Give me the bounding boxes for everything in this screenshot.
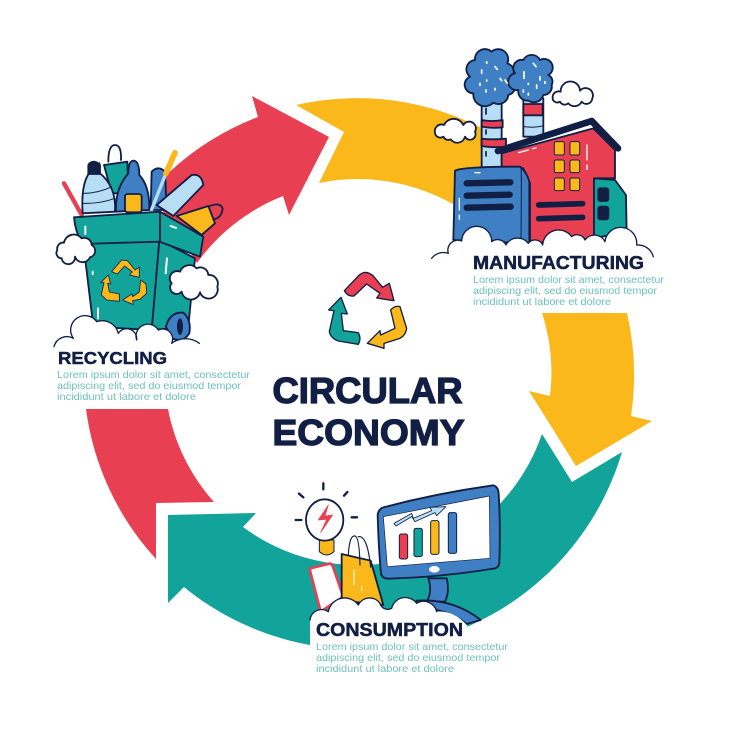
rays	[296, 483, 357, 520]
bar chart	[399, 513, 457, 559]
bin front	[83, 240, 159, 330]
phone	[310, 564, 343, 612]
red building	[502, 128, 615, 243]
smoke highlights	[480, 62, 545, 95]
small cloud left	[435, 119, 476, 143]
chimney right	[523, 98, 543, 137]
cloud base	[54, 316, 199, 350]
cloud left	[56, 235, 95, 264]
illustration: factory	[432, 49, 653, 260]
blue roll	[151, 168, 167, 210]
cloud base	[432, 226, 653, 260]
cloud base	[310, 597, 480, 683]
blue building	[453, 167, 529, 243]
small cloud right	[553, 81, 593, 106]
red stick	[64, 183, 82, 215]
text: recycling: RECYCLING	[58, 348, 167, 368]
arrow: yellow right	[529, 313, 652, 466]
roof	[498, 121, 618, 151]
monitor	[378, 485, 500, 579]
screwdriver	[152, 173, 166, 209]
title	[272, 370, 464, 453]
bin recycle symbol	[101, 260, 147, 305]
text: consumption: adipiscing elit, sed do eiusmod tempor	[316, 653, 501, 664]
title: ECONOMY	[272, 412, 464, 453]
illustration: recycling bin	[54, 145, 223, 350]
text: manufacturing: incididunt ut labore et dolore	[473, 297, 611, 308]
windows	[554, 142, 580, 191]
smoke right	[508, 55, 553, 102]
title: CIRCULAR	[272, 370, 462, 411]
text: consumption: Lorem ipsum dolor sit amet, consectetur	[316, 642, 509, 653]
shopping bag	[342, 554, 383, 605]
teal arrow	[329, 297, 360, 344]
smoke left	[465, 49, 516, 106]
red arrow	[344, 272, 394, 301]
text: consumption: incididunt ut labore et dolore	[316, 664, 454, 675]
text: recycling: incididunt ut labore et dolore	[57, 392, 196, 403]
yellow arrow	[367, 306, 407, 348]
text: consumption: CONSUMPTION	[316, 620, 463, 640]
text: recycling: Lorem ipsum dolor sit amet, consectetur	[57, 370, 251, 381]
teal bag	[104, 162, 129, 193]
light tube	[157, 175, 203, 216]
teal building	[594, 178, 627, 238]
yellow bag	[177, 206, 215, 235]
icon: recycle symbol	[329, 272, 407, 348]
text: manufacturing: MANUFACTURING	[473, 253, 644, 273]
text: recycling: adipiscing elit, sed do eiusmod tempor	[57, 381, 242, 392]
illustration: consumption	[296, 483, 500, 683]
arrow: red lower	[86, 409, 214, 559]
blue bottle	[116, 161, 149, 212]
light bulb	[319, 540, 334, 555]
bin lid	[74, 212, 203, 257]
trend arrow	[394, 507, 446, 526]
arrow: teal bottom	[168, 434, 622, 649]
text: recycling	[57, 348, 251, 403]
text: manufacturing: Lorem ipsum dolor sit amet, consectetur	[473, 275, 665, 286]
water bottle	[82, 163, 115, 213]
text: consumption	[316, 620, 509, 675]
monitor stand	[427, 578, 448, 602]
arrow: red upper	[150, 96, 329, 263]
cloud right	[170, 265, 218, 300]
wheel	[166, 313, 190, 340]
arrow: yellow upper	[296, 98, 503, 215]
chimney left	[482, 100, 502, 168]
text: manufacturing: adipiscing elit, sed do eiusmod tempor	[473, 286, 658, 297]
bin side	[152, 240, 195, 330]
vents	[539, 204, 583, 219]
text: manufacturing	[473, 253, 665, 308]
